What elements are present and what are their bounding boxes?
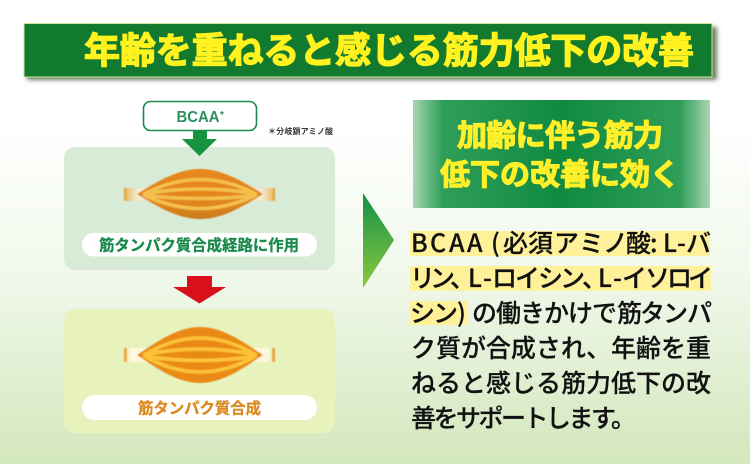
green headline box [413, 100, 710, 208]
red arrow [173, 276, 226, 304]
BCAA box [144, 102, 256, 130]
green arrow [182, 131, 217, 156]
body text: 善をサポートします。 [411, 399, 636, 435]
body text: ねると感じる筋力低下の改 [411, 364, 711, 400]
body text: リン、L-ロイシン、L-イソロイ [410, 259, 713, 295]
title banner [24, 24, 717, 80]
body text [410, 224, 713, 435]
panel: BCAA action on muscle [64, 147, 335, 270]
title text: 年齢を重ねると感じる筋力低下の改善 [84, 30, 694, 71]
icon: muscle [124, 327, 275, 383]
pill label [82, 233, 317, 256]
pill label [82, 395, 317, 420]
footnote: ＊分岐鎖アミノ酸 [268, 126, 333, 136]
pill label: 筋タンパク質合成経路に作用 [99, 236, 299, 254]
body text: ク質が合成され、年齢を重 [411, 329, 711, 365]
green headline box: 低下の改善に効く [440, 159, 680, 192]
BCAA box: * [220, 110, 224, 121]
body text: シン)の働きかけで筋タンパ [410, 294, 712, 330]
headline text: 加齢に伴う筋力 [457, 120, 663, 153]
panel: muscle protein synthesis [64, 309, 335, 433]
body text: BCAA(必須アミノ酸:L-バ [411, 224, 711, 260]
pill label: 筋タンパク質合成 [138, 398, 261, 418]
large right arrow [363, 193, 394, 288]
BCAA box: BCAA [176, 109, 220, 126]
icon: muscle [124, 169, 275, 219]
